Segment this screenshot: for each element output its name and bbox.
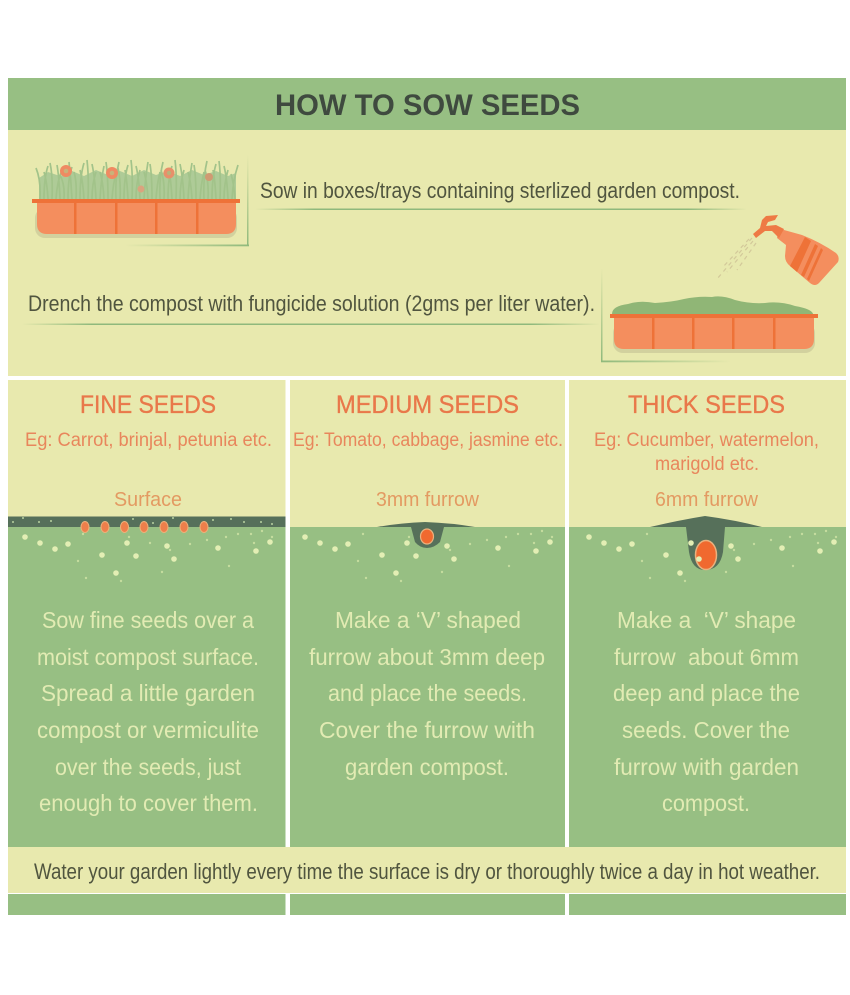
examples: thick seeds: Eg: Cucumber, watermelon, <box>594 430 819 451</box>
label: 3mm furrow: 3mm furrow <box>376 489 480 511</box>
label: 6mm furrow: 6mm furrow <box>655 489 759 511</box>
footer column strips <box>8 894 846 915</box>
tray shadow <box>35 208 237 238</box>
instructions: fine seeds: over the seeds, just <box>55 754 242 780</box>
instructions: thick seeds: Make a ‘V’ shape <box>617 607 796 633</box>
examples: medium seeds: Eg: Tomato, cabbage, jasmine etc. <box>293 430 563 451</box>
illustration: tray with grass and flowers <box>32 160 240 238</box>
underline step 1 <box>255 208 747 210</box>
underline step 2 <box>22 324 600 325</box>
instructions: fine seeds: Spread a little garden <box>41 680 255 706</box>
instructions: medium seeds: garden compost. <box>345 754 509 780</box>
soil diagram: 3mm furrow <box>302 522 553 582</box>
instructions: thick seeds: deep and place the <box>613 680 800 706</box>
label: surface: Surface <box>114 489 182 511</box>
icon: spray bottle <box>717 215 839 285</box>
examples: thick seeds <box>594 430 819 475</box>
instructions: fine seeds: enough to cover them. <box>39 790 258 816</box>
flowers <box>60 165 213 192</box>
instructions: fine seeds: Sow fine seeds over a <box>42 607 254 633</box>
bracket line beside second tray <box>601 268 731 362</box>
instructions: thick seeds: furrow with garden <box>614 754 799 780</box>
heading: medium seeds: MEDIUM SEEDS <box>336 391 519 419</box>
header bar <box>8 78 846 130</box>
examples: fine seeds: Eg: Carrot, brinjal, petunia etc. <box>25 430 272 451</box>
instructions: fine seeds: moist compost surface. <box>37 644 259 670</box>
step 2 text: Drench the compost with fungicide solution (2gms per liter water). <box>28 291 595 316</box>
instructions: thick seeds: compost. <box>662 790 750 816</box>
bracket line beside first tray <box>125 155 249 246</box>
instructions: medium seeds <box>309 607 545 780</box>
panel: fine seeds <box>8 380 286 847</box>
heading: thick seeds: THICK SEEDS <box>628 391 785 419</box>
panel: preparation steps <box>8 130 846 376</box>
tray body <box>37 203 236 234</box>
instructions: medium seeds: Make a ‘V’ shaped <box>335 607 521 633</box>
instructions: medium seeds: furrow about 3mm deep <box>309 644 545 670</box>
instructions: thick seeds: seeds. Cover the <box>622 717 790 743</box>
tray rim and dividers <box>32 199 240 234</box>
instructions: medium seeds: Cover the furrow with <box>319 717 535 743</box>
instructions: fine seeds <box>37 607 259 816</box>
instructions: thick seeds <box>613 607 800 816</box>
title: HOW TO SOW SEEDS <box>275 89 580 122</box>
spray droplets <box>717 238 756 279</box>
panel: thick seeds <box>569 380 846 847</box>
soil diagram: 6mm furrow <box>586 516 837 582</box>
instructions: medium seeds: and place the seeds. <box>328 680 527 706</box>
step 1 text: Sow in boxes/trays containing sterlized garden compost. <box>260 178 740 203</box>
examples: thick seeds: marigold etc. <box>655 454 759 475</box>
illustration: tray with compost <box>610 296 818 353</box>
instructions: thick seeds: furrow about 6mm <box>614 644 799 670</box>
panel: medium seeds <box>290 380 565 847</box>
heading: fine seeds: FINE SEEDS <box>80 391 216 419</box>
soil diagram: seeds on surface <box>8 516 286 582</box>
watering note band <box>8 847 846 893</box>
instructions: fine seeds: compost or vermiculite <box>37 717 259 743</box>
